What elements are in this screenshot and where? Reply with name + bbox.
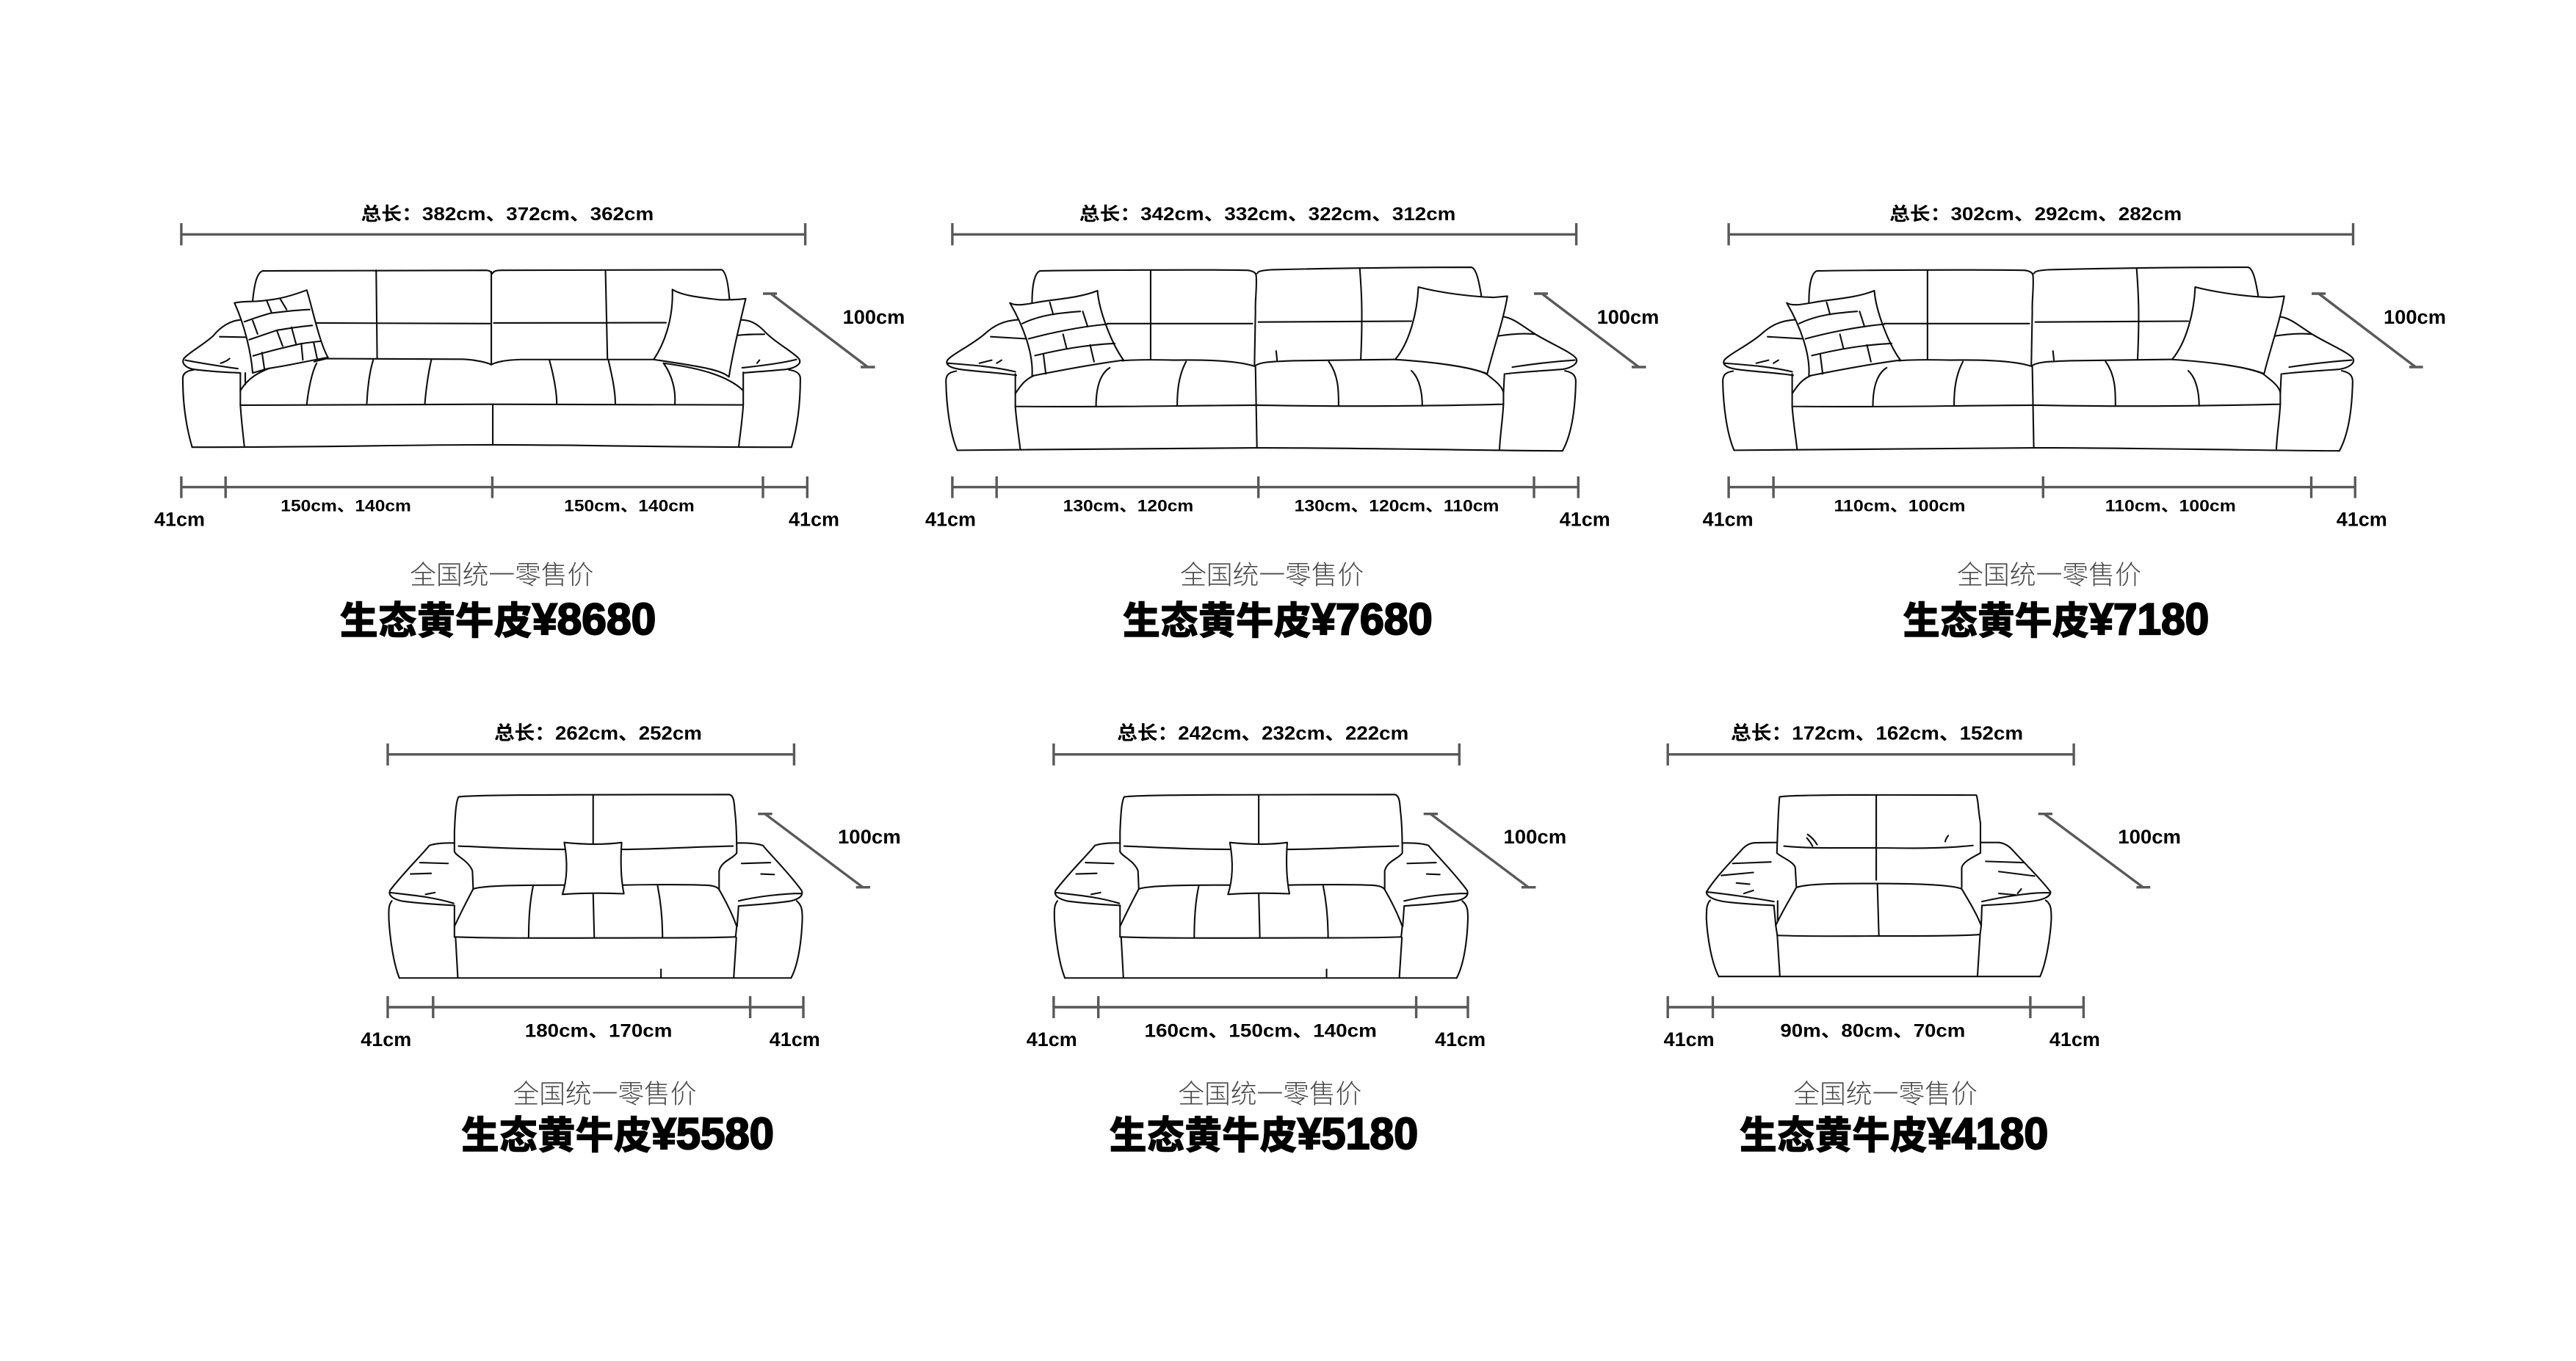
height dimension line	[2312, 294, 2423, 367]
total length label: 总长：382cm、372cm、362cm	[361, 204, 654, 225]
width dimension line	[1668, 996, 2083, 1018]
width dimension line	[952, 476, 1578, 498]
panel: 382cm sofa	[154, 204, 905, 644]
total length dimension line	[1054, 744, 1459, 766]
seat width label: 160cm、150cm、140cm	[1144, 1021, 1377, 1042]
seat width label: 90m、80cm、70cm	[1780, 1021, 1965, 1042]
price: 生态黄牛皮¥4180	[1740, 1109, 2048, 1158]
right arm width label: 41cm	[789, 509, 839, 531]
price: 生态黄牛皮¥8680	[340, 595, 656, 644]
left arm width label: 41cm	[925, 509, 976, 531]
retail price caption: 全国统一零售价	[1793, 1079, 1978, 1108]
right arm width label: 41cm	[1435, 1028, 1486, 1050]
left arm width label: 41cm	[1027, 1028, 1077, 1050]
retail price caption: 全国统一零售价	[410, 559, 593, 590]
right seat width label: 130cm、120cm、110cm	[1295, 497, 1499, 515]
panel: 262cm sofa	[361, 722, 901, 1158]
price: 生态黄牛皮¥7180	[1903, 595, 2209, 644]
height dimension line	[763, 294, 875, 367]
height label: 100cm	[838, 826, 901, 848]
right arm width label: 41cm	[1560, 509, 1610, 531]
right seat width label: 110cm、100cm	[2105, 497, 2236, 515]
height label: 100cm	[1504, 826, 1566, 848]
right arm width label: 41cm	[2049, 1028, 2100, 1050]
right arm width label: 41cm	[2337, 509, 2387, 531]
armchair line drawing	[1707, 795, 2051, 976]
total length dimension line	[1668, 744, 2074, 766]
total length label: 总长：302cm、292cm、282cm	[1889, 204, 2182, 225]
price: 生态黄牛皮¥5580	[461, 1109, 774, 1158]
right arm width label: 41cm	[770, 1028, 820, 1050]
left arm width label: 41cm	[361, 1028, 411, 1050]
height dimension line	[1424, 814, 1535, 888]
height label: 100cm	[2384, 306, 2446, 328]
height dimension line	[1534, 294, 1646, 367]
total length label: 总长：262cm、252cm	[494, 722, 702, 744]
height label: 100cm	[843, 306, 905, 328]
retail price caption: 全国统一零售价	[513, 1079, 696, 1108]
panel: 242cm sofa	[1027, 722, 1566, 1158]
seat width label: 180cm、170cm	[525, 1021, 672, 1042]
total length label: 总长：242cm、232cm、222cm	[1117, 722, 1408, 744]
retail price caption: 全国统一零售价	[1180, 559, 1364, 590]
height label: 100cm	[2118, 826, 2181, 848]
height dimension line	[2038, 814, 2150, 888]
height label: 100cm	[1597, 306, 1659, 328]
left arm width label: 41cm	[1703, 509, 1754, 531]
total length dimension line	[181, 223, 806, 245]
sofa line drawing	[183, 269, 800, 447]
left seat width label: 150cm、140cm	[281, 497, 411, 515]
total length dimension line	[1729, 223, 2353, 245]
left seat width label: 130cm、120cm	[1063, 497, 1193, 515]
price: 生态黄牛皮¥5180	[1109, 1109, 1418, 1158]
panel: 172cm sofa	[1664, 722, 2181, 1158]
sofa line drawing	[1723, 267, 2354, 451]
left arm width label: 41cm	[1664, 1028, 1715, 1050]
right seat width label: 150cm、140cm	[564, 497, 695, 515]
left arm width label: 41cm	[154, 509, 205, 531]
width dimension line	[1729, 476, 2355, 498]
retail price caption: 全国统一零售价	[1957, 559, 2141, 590]
retail price caption: 全国统一零售价	[1178, 1079, 1361, 1108]
sofa line drawing	[946, 267, 1577, 451]
total length label: 总长：342cm、332cm、322cm、312cm	[1079, 204, 1455, 225]
left seat width label: 110cm、100cm	[1834, 497, 1965, 515]
panel: 342cm sofa	[925, 204, 1659, 644]
sofa line drawing	[1054, 794, 1468, 978]
total length dimension line	[952, 223, 1577, 245]
price: 生态黄牛皮¥7680	[1123, 595, 1433, 644]
width dimension line	[1054, 996, 1468, 1018]
width dimension line	[181, 476, 807, 498]
height dimension line	[758, 814, 870, 888]
total length label: 总长：172cm、162cm、152cm	[1731, 722, 2023, 744]
panel: 302cm sofa	[1703, 204, 2446, 644]
width dimension line	[388, 996, 803, 1018]
sofa line drawing	[388, 794, 803, 978]
total length dimension line	[388, 744, 794, 766]
